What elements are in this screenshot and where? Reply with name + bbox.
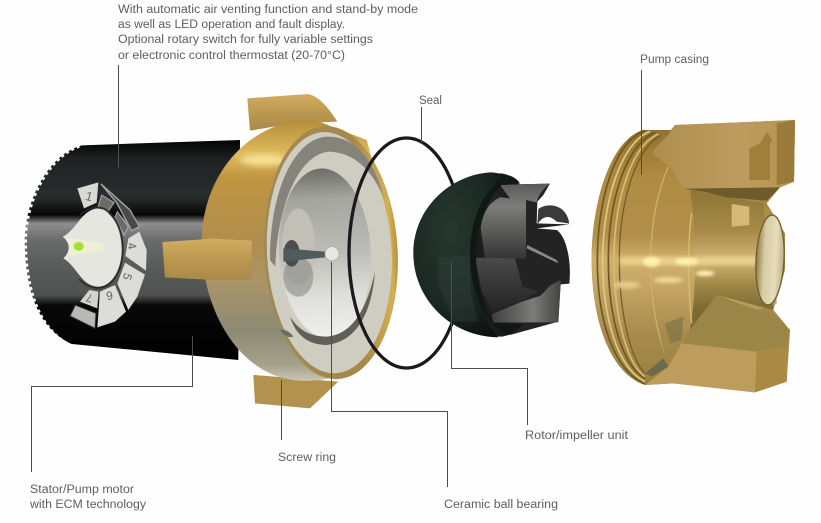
metal highlights: [613, 256, 760, 288]
dial centre with LED: [63, 208, 122, 287]
rotor rim: [470, 175, 523, 336]
ceramic ball bearing: [325, 247, 339, 261]
ring body: [202, 120, 397, 381]
centre hub: [655, 167, 777, 367]
dial numbers: [84, 189, 139, 304]
lug bottom: [253, 375, 338, 408]
upper hub shadow: [683, 187, 780, 201]
impeller blades: [462, 173, 570, 337]
seal o-ring: [349, 138, 464, 368]
lug left: [162, 239, 252, 280]
callout: features text: [118, 4, 418, 62]
label: stator/pump motor: with ECM technology: [29, 499, 146, 511]
wedge shadow: [645, 358, 668, 377]
threads: [597, 131, 668, 384]
dial numbers: 6: [105, 288, 114, 303]
hub highlight window: [732, 204, 749, 227]
label: ceramic ball bearing: Ceramic ball bearing: [444, 499, 558, 511]
stator / pump motor: [25, 140, 240, 360]
label: stator/pump motor: Stator/Pump motor: [30, 484, 134, 496]
rotor hub: [282, 208, 315, 297]
pump casing: [592, 120, 795, 392]
screw ring: [162, 94, 397, 408]
dial numbers: 7: [85, 291, 94, 304]
label: stator/pump motor: [29, 484, 146, 511]
label: seal: Seal: [419, 95, 442, 107]
lower block: [645, 343, 787, 392]
callout: features text: or electronic control thermostat (20-70°C): [118, 50, 345, 62]
rotor / impeller unit: [413, 172, 570, 337]
arrow recess: [749, 132, 773, 180]
dial numbers: 4: [124, 241, 139, 251]
callout: features text: as well as LED operation and fault display.: [118, 19, 345, 31]
lug top: [247, 94, 337, 131]
rotor dome: [413, 172, 507, 337]
motor body: [25, 140, 240, 360]
dial numbers: 1: [84, 189, 94, 204]
shaft: [283, 248, 325, 262]
label: rotor/impeller unit: Rotor/impeller unit: [525, 430, 629, 442]
label: screw ring: Screw ring: [278, 452, 336, 464]
lower shadow facet: [682, 295, 790, 352]
callout: features text: Optional rotary switch for fully variable settings: [118, 34, 373, 46]
control dial: [63, 182, 147, 328]
casing silhouette: [592, 120, 795, 392]
top block: [652, 120, 795, 189]
callout: features text: With automatic air venting function and stand-by mode: [118, 4, 418, 16]
dial numbers: 5: [119, 271, 135, 283]
threaded collar: [592, 130, 690, 385]
ring opening: [258, 123, 404, 383]
leader lines: [32, 65, 642, 487]
end disc: [754, 214, 786, 306]
label: pump casing: Pump casing: [640, 54, 709, 66]
